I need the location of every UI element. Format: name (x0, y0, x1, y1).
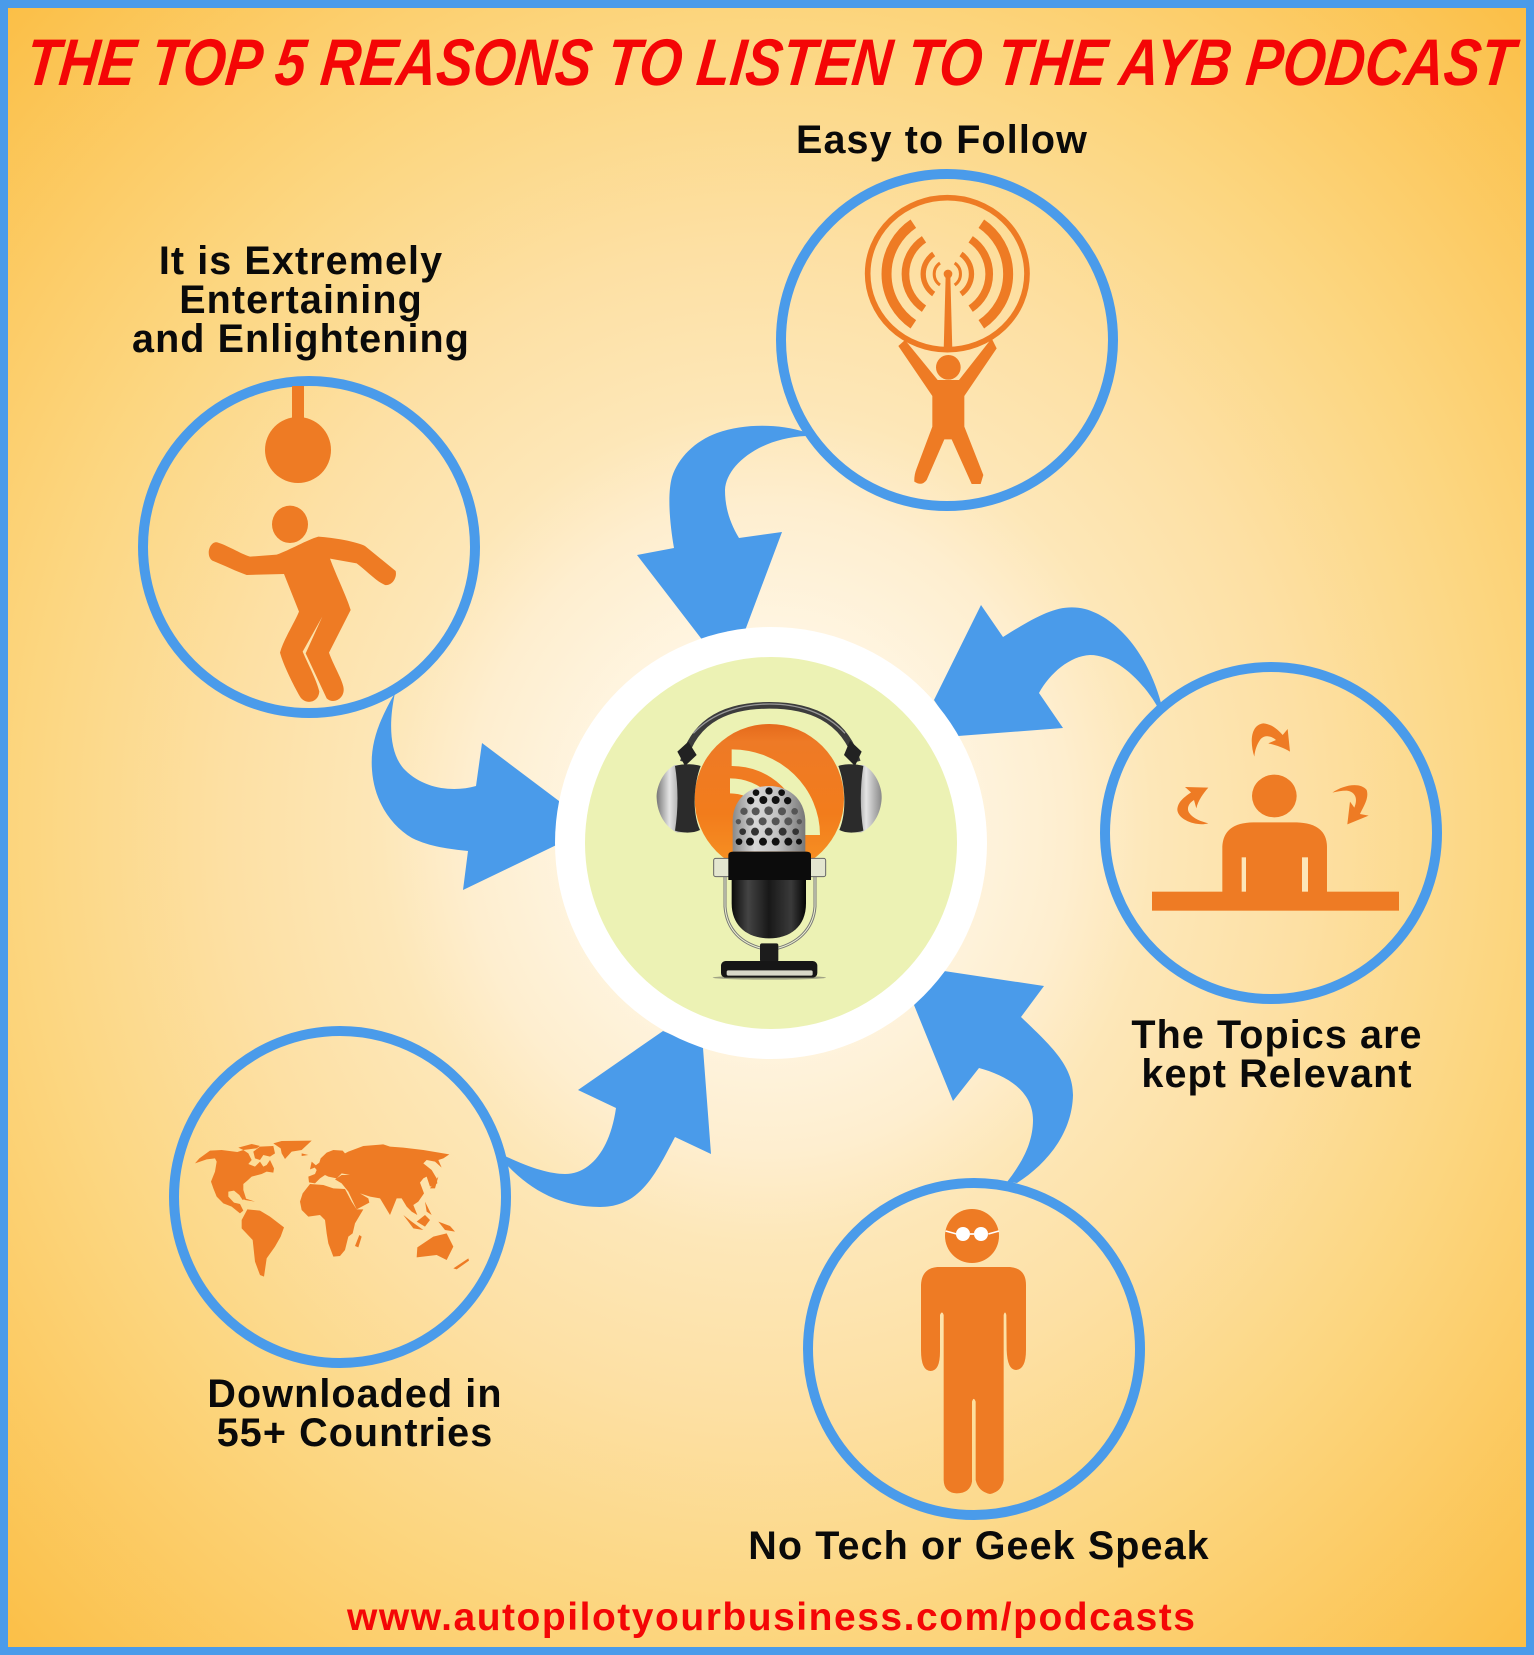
label: no tech or geek speak: No Tech or Geek Speak (748, 1524, 1210, 1568)
panel: easy to follow (781, 118, 1113, 506)
arrow: easy to follow to centre (637, 426, 806, 663)
arrow: countries to centre (505, 1031, 711, 1207)
arrow: entertaining to centre (372, 693, 573, 890)
panel: downloaded in 55+ countries (174, 1031, 506, 1455)
label: relevant topics: kept Relevant (1141, 1052, 1413, 1096)
label: downloaded in 55+ countries (207, 1372, 503, 1455)
website address: www.autopilotyourbusiness.com/podcasts (346, 1596, 1195, 1639)
label: easy to follow: Easy to Follow (796, 118, 1088, 162)
icon: podcast microphone with headphones (657, 704, 882, 980)
icon: world map (195, 1141, 469, 1277)
arrows pointing to the centre (372, 426, 1161, 1207)
label: relevant topics (1131, 1013, 1423, 1096)
central podcast badge (555, 627, 987, 1059)
icon: person dancing under a disco ball (209, 386, 396, 702)
arrow: relevant topics to centre (934, 605, 1161, 736)
label: entertaining and enlightening: and Enlightening (132, 317, 470, 361)
label: entertaining and enlightening (132, 239, 470, 361)
panel: no tech or geek speak (748, 1183, 1210, 1568)
panel: relevant topics (1105, 667, 1437, 1096)
label: relevant topics: The Topics are (1131, 1013, 1423, 1057)
panel: entertaining and enlightening (132, 239, 475, 713)
arrow: no tech speak to centre (914, 971, 1073, 1183)
label: entertaining and enlightening: Entertaining (179, 278, 423, 322)
icon: person at a desk with rotating arrows (1152, 723, 1399, 911)
label: downloaded in 55+ countries: Downloaded in (207, 1372, 503, 1416)
icon: person holding a broadcast signal (868, 198, 1027, 484)
label: entertaining and enlightening: It is Extremely (159, 239, 443, 283)
label: downloaded in 55+ countries: 55+ Countries (217, 1411, 493, 1455)
icon: standing person with glasses (921, 1209, 1026, 1494)
